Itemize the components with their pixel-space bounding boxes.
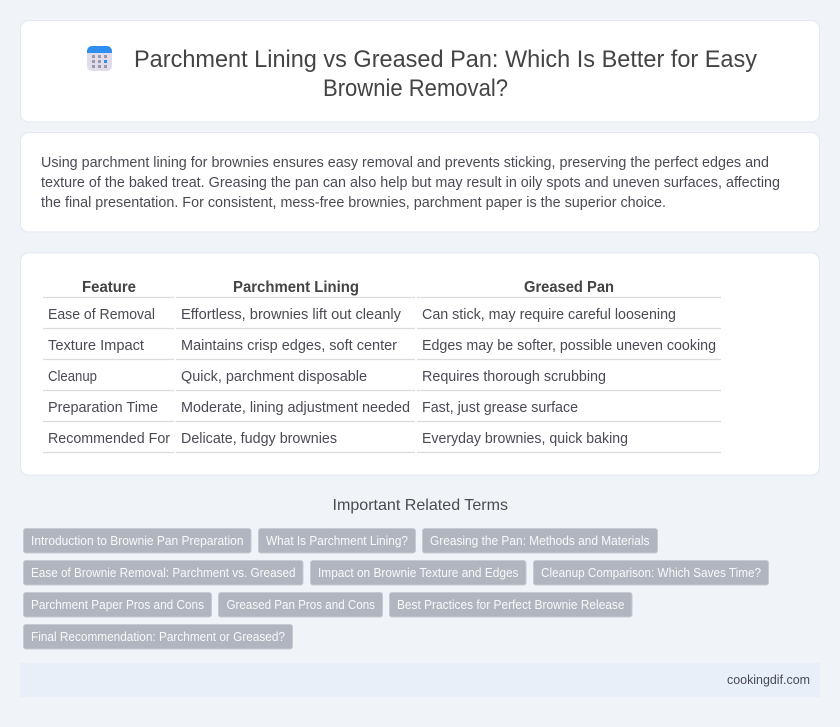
row: cleanup xyxy=(48,369,606,385)
row: preparation time: Preparation Time xyxy=(48,400,158,416)
table header: Parchment Lining xyxy=(233,279,359,296)
row: preparation time: Moderate, lining adjustment needed xyxy=(181,400,410,416)
icon: calendar xyxy=(87,46,112,71)
heading: related terms: Important Related Terms xyxy=(332,497,508,514)
row: cleanup: Quick, parchment disposable xyxy=(181,369,367,385)
text block: summary: texture of the baked treat. Greasing the pan can also help but may result in oily spots and uneven surfaces, affecting xyxy=(41,175,780,191)
panel: comparison table xyxy=(20,253,820,475)
text block: summary xyxy=(41,155,780,211)
row: cleanup: Requires thorough scrubbing xyxy=(422,369,606,385)
tag list: related terms: Final Recommendation: Parchment or Greased? xyxy=(31,630,285,644)
row: cleanup: Cleanup xyxy=(48,369,97,385)
tag list: related terms: Impact on Brownie Texture and Edges xyxy=(318,566,518,580)
row: texture impact: Texture Impact xyxy=(48,338,144,354)
row: texture impact xyxy=(48,338,716,354)
row: texture impact: Maintains crisp edges, soft center xyxy=(181,338,397,354)
tag list: related terms: Best Practices for Perfect Brownie Release xyxy=(397,598,625,612)
row: recommended for: Everyday brownies, quick baking xyxy=(422,431,628,447)
row: ease of removal: Ease of Removal xyxy=(48,307,155,323)
row: preparation time: Fast, just grease surface xyxy=(422,400,578,416)
table header xyxy=(82,279,614,296)
row: recommended for xyxy=(48,431,628,447)
text block: summary: Using parchment lining for brownies ensures easy removal and prevents sticking, preserving the perfect edges and xyxy=(41,155,769,171)
panel: header xyxy=(20,20,820,122)
footer xyxy=(20,663,820,697)
table header: Feature xyxy=(82,279,136,296)
title: Parchment Lining vs Greased Pan: Which Is Better for Easy xyxy=(134,46,757,73)
row: recommended for: Delicate, fudgy brownies xyxy=(181,431,337,447)
tag list: related terms: What Is Parchment Lining? xyxy=(266,534,408,548)
tag list: related terms: Greasing the Pan: Methods and Materials xyxy=(430,534,650,548)
tag list: related terms: Cleanup Comparison: Which Saves Time? xyxy=(541,566,761,580)
footer: cookingdif.com xyxy=(727,673,810,687)
row: texture impact: Edges may be softer, possible uneven cooking xyxy=(422,338,716,354)
row: ease of removal xyxy=(48,307,676,323)
tag list: related terms xyxy=(24,528,768,649)
tag list: related terms: Greased Pan Pros and Cons xyxy=(226,598,375,612)
title: Brownie Removal? xyxy=(323,75,508,102)
row: ease of removal: Can stick, may require careful loosening xyxy=(422,307,676,323)
row: recommended for: Recommended For xyxy=(48,431,170,447)
table header: Greased Pan xyxy=(524,279,614,296)
row: preparation time xyxy=(48,400,578,416)
row: ease of removal: Effortless, brownies lift out cleanly xyxy=(181,307,402,323)
tag list: related terms: Parchment Paper Pros and Cons xyxy=(31,598,204,612)
panel: introduction xyxy=(20,132,820,232)
tag list: related terms: Ease of Brownie Removal: Parchment vs. Greased xyxy=(31,566,296,580)
text block: summary: the final presentation. For consistent, mess-free brownies, parchment paper is the superior choice. xyxy=(41,195,666,211)
title xyxy=(134,46,757,102)
tag list: related terms: Introduction to Brownie Pan Preparation xyxy=(31,534,244,548)
